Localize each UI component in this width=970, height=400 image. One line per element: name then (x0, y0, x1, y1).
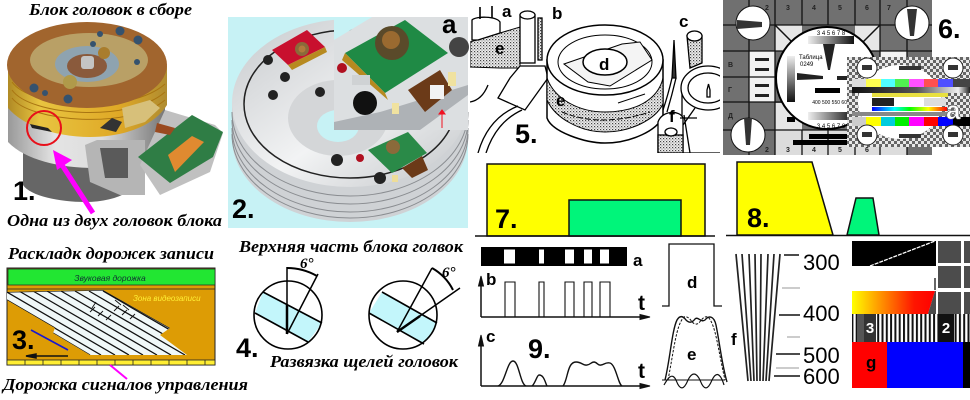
pulse d: d (687, 273, 697, 292)
main test card: 2 (765, 5, 769, 12)
letters: b (552, 4, 562, 23)
main test card: 5 (838, 5, 842, 12)
pulse chart b: b (486, 270, 496, 289)
panel 7: spectrum diagram (475, 164, 715, 236)
pulse chart b: t (638, 292, 645, 315)
yellow spectrum block (487, 164, 705, 236)
number 1: 1. (13, 176, 36, 206)
scale ticks and labels: 500 (803, 343, 840, 368)
wedge f: f (731, 330, 737, 349)
video tracks (7, 288, 214, 355)
main test card (723, 0, 932, 155)
number 5: 5. (515, 119, 538, 149)
title: track layout: Раскладк дорожек записи (7, 244, 214, 263)
panel 5: tape path line drawing (470, 2, 735, 153)
wedge f (731, 254, 780, 381)
scale ticks and labels: 400 (803, 301, 840, 326)
main test card: Г (728, 87, 732, 94)
waveform chart c: c (486, 327, 495, 346)
letters: e (495, 39, 504, 58)
main test card: 4 (812, 147, 816, 154)
scale ticks and labels (774, 250, 840, 389)
video zone label: Зона видеозаписи (133, 294, 201, 303)
number 4: 4. (236, 333, 259, 363)
inset a: colour test card (847, 57, 970, 147)
response e: e (687, 345, 696, 364)
red head assembly (272, 30, 327, 70)
panel 4: head gap angles (236, 237, 463, 371)
caption: gap decoupling: Развязка щелей головок (269, 352, 458, 371)
number 6: 6. (938, 14, 961, 44)
scale ticks and labels: 300 (803, 250, 840, 275)
yellow trapezoid (737, 162, 833, 235)
number 8: 8. (747, 203, 770, 233)
number 3: 3. (12, 325, 35, 355)
bar pattern a (481, 247, 643, 270)
pulse d (662, 244, 722, 306)
letters: c (679, 12, 688, 31)
panel 9: signal waveforms (478, 241, 970, 389)
main test card: 3 4 5 6 7 8 (817, 31, 846, 37)
blue direction arrow (31, 330, 68, 350)
green trapezoid (847, 198, 879, 235)
arrow: magenta pointer (53, 150, 93, 213)
letter a: a (946, 95, 961, 125)
caption: one of two heads: Одна из двух головок блока (7, 211, 223, 230)
reel (680, 65, 720, 153)
waveform chart c (478, 327, 650, 388)
waveform chart c: t (638, 360, 645, 383)
right gap diagram: 6° (442, 265, 456, 281)
main test card: 6 (865, 147, 869, 154)
right gap diagram (369, 265, 460, 349)
main test card: 7 (887, 5, 891, 12)
black direction arrow (26, 354, 68, 358)
main test card: 0249 (800, 62, 814, 68)
title: upper block: Верхняя часть блока голвок (238, 237, 463, 256)
letter a: a (442, 9, 457, 39)
number 7: 7. (495, 204, 518, 234)
bar pattern a: a (633, 251, 643, 270)
callout circle (27, 111, 61, 145)
tape background (7, 268, 215, 365)
guide f (658, 108, 697, 153)
photo: drum with connector (7, 22, 223, 202)
colour block g: 2 (942, 320, 950, 337)
main test card: 3 (786, 5, 790, 12)
response e (662, 317, 727, 388)
main test card: 6 (865, 5, 869, 12)
main test card: Д (728, 113, 733, 120)
letters: a (502, 2, 512, 21)
audio track (8, 269, 215, 285)
control track strip (7, 360, 215, 365)
left gap diagram: 6° (300, 256, 314, 272)
green spectrum block (569, 200, 681, 236)
main test card: Таблица (799, 55, 823, 61)
background (228, 17, 468, 228)
green head assembly (368, 132, 428, 182)
tape curve lower left (470, 85, 522, 153)
pulse chart b (478, 270, 650, 320)
red arrow in inset (439, 110, 445, 128)
letters: e (556, 91, 565, 110)
main test card: 400 500 550 600 (812, 100, 850, 106)
main test card: 5 (838, 147, 842, 154)
colour block g: g (866, 353, 876, 372)
tape left section (470, 27, 520, 68)
letters: f (669, 107, 675, 126)
letters: d (599, 55, 609, 74)
left gap diagram (254, 256, 322, 349)
panel 2: lower drum photo with head inset (228, 9, 469, 228)
magenta pointer (110, 365, 127, 379)
axis line (726, 234, 970, 236)
guide c (663, 31, 702, 112)
colour block g (852, 241, 970, 388)
post b (498, 11, 548, 110)
main test card: В (728, 62, 733, 69)
scale ticks and labels: 600 (803, 364, 840, 389)
number 2: 2. (232, 194, 255, 224)
caption: control track: Дорожка сигналов управления (1, 375, 248, 394)
panel 8: spectrum diagram with rolloff (726, 162, 970, 236)
letters (495, 2, 688, 126)
main test card: 2 (765, 147, 769, 154)
colour block g: 3 (866, 320, 874, 337)
inset a: head close-up (334, 9, 469, 130)
axis line (475, 235, 715, 237)
panel 1: assembled head block photo (7, 0, 223, 230)
panel 6: television test card (723, 0, 970, 155)
drum (547, 25, 663, 143)
main test card: 3 (786, 147, 790, 154)
panel 3: track layout (0, 244, 248, 394)
drum body (232, 19, 468, 222)
main test card: 3 4 5 6 7 8 (817, 124, 846, 130)
head a (472, 6, 500, 40)
main test card: 4 (812, 5, 816, 12)
audio track label: Звуковая дорожка (74, 273, 146, 283)
title: assembled block: Блок головок в сборе (28, 0, 192, 19)
number 9: 9. (528, 334, 551, 364)
